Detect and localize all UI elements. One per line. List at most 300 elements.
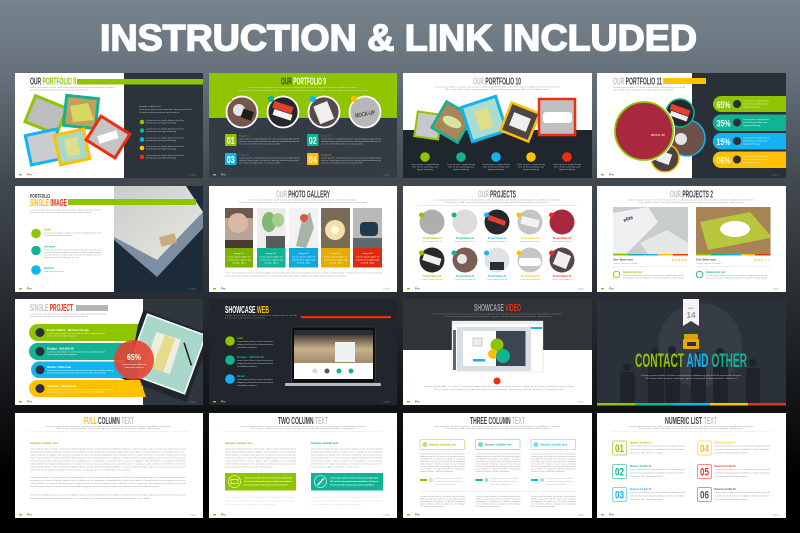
percentage pills: typesetting	[743, 161, 761, 164]
heading: CONTACT AND OTHER	[635, 351, 747, 372]
right column: Lorem ipsum dolor sit amet consectetur adipiscing elit sed do eiusmod	[311, 456, 383, 460]
intro text	[628, 198, 755, 204]
slide footers: logos	[19, 172, 614, 516]
features: incididunt labore	[237, 384, 258, 387]
column text: exercitation ullamco laboris nisi aliquip	[476, 462, 522, 466]
left column: Lorem ipsum dolor sit amet consectetur adipiscing elit sed do eiusmod	[225, 456, 297, 460]
intro text: Lorem ipsum dolor sit amet consectetur adipiscing elit sed do	[30, 312, 107, 316]
gallery captions: Lorem ipsum dolor sit	[324, 256, 347, 258]
right column: nostrud exercitation ullamco laboris nisi ut aliquip ex ea commodo	[311, 500, 381, 502]
percentage pills: Lorem ipsum is simply dummy	[743, 118, 770, 121]
ribbon badge: PART	[688, 307, 694, 310]
slide footers: logos: Pro	[27, 172, 32, 176]
numbered items: industry Lorem ipsum has been the industry standard dummy text	[239, 140, 299, 143]
accent markers: Lorem ipsum sit amet dolor	[546, 477, 573, 480]
slide footers: navigation: ⇦⊙⇨	[383, 400, 391, 404]
features: adipiscing elit sed do eiusmod tempor	[237, 343, 273, 346]
right column: nostrud exercitation ullamco laboris nisi ut aliquip ex ea commodo	[311, 460, 383, 462]
gallery photos	[225, 208, 382, 248]
list text: Numeric list title 02	[630, 465, 652, 468]
column text: Lorem ipsum dolor sit amet consectetur	[531, 452, 576, 456]
numbered items: industry Lorem ipsum has been the industry standard dummy text	[239, 159, 299, 162]
body text	[424, 385, 575, 391]
body text: Lorem ipsum dolor sit amet consectetur adipiscing elit sed do eiusmod tempor incididunt ut labore et dolore magna aliqua ut enim ad minim veniam quis	[30, 456, 185, 460]
colour strip	[597, 403, 786, 406]
subtitle boxes: Sample subtitle text	[484, 444, 512, 447]
bullet list: printing and typesetting	[146, 148, 177, 150]
slide: Contact and Other	[597, 299, 786, 406]
intro text: Ut enim ad minim veniam quis nostrud	[30, 315, 89, 318]
column text: Ut enim ad minim veniam quis nostrud	[476, 460, 522, 463]
list text: Ut enim ad minim veniam	[714, 452, 748, 454]
project pills: eiusmod tempor	[47, 353, 78, 356]
silhouettes photo	[620, 346, 760, 403]
gallery captions: consectetur adipiscing	[356, 258, 380, 262]
features: Lorem ipsum dolor sit amet consectetur	[237, 340, 273, 343]
lower text: Lorem ipsum dolor sit amet consectetur	[531, 495, 576, 498]
icon captions: typesetting	[453, 168, 470, 171]
left column: Lorem ipsum dolor sit amet consectetur adipiscing elit sed do eiusmod	[225, 496, 295, 499]
column text: adipiscing elit sed do eiusmod tempor	[476, 455, 521, 458]
left column: cillum dolore eu fugiat nulla pariatur	[225, 503, 275, 506]
sample items	[613, 271, 768, 280]
slide footers: navigation: ⇦⊙⇨	[189, 400, 197, 404]
accent markers: sed do eiusmod	[546, 484, 567, 486]
project labels: Project Name 07	[456, 275, 475, 278]
icon captions: typesetting	[417, 168, 434, 171]
intro text	[45, 425, 172, 430]
project labels	[422, 237, 572, 281]
slide: Three Column Text	[403, 413, 592, 518]
left column: elit sed do eiusmod tempor incididunt ut labore	[244, 480, 293, 483]
slide footers: navigation: ⇦⊙⇨	[383, 173, 391, 177]
list text: sed do eiusmod tempor incididunt ut labore et dolore	[714, 448, 770, 451]
numbered items: 02	[309, 136, 317, 147]
numbered items: ever since the 1500s when an unknown printer	[239, 162, 281, 164]
gallery captions: Image 03	[298, 253, 309, 255]
column text: exercitation ullamco laboris nisi aliquip	[531, 462, 577, 466]
intro text: Ut enim ad minim veniam quis nostrud exercitation ullamco laboris nisi ut aliquip ex ea commodo	[238, 89, 369, 92]
left column: Lorem ipsum dolor sit amet consectetur	[225, 466, 273, 468]
accent bar	[68, 199, 196, 205]
features: incididunt labore	[237, 365, 258, 368]
features: Goal	[237, 337, 243, 340]
project labels: Project Name 08	[488, 275, 507, 278]
slide footers: logos: Pro	[415, 400, 420, 404]
intro text: Ut enim ad minim veniam quis nostrud exercitation ullamco	[445, 427, 551, 430]
software screenshot	[452, 321, 543, 372]
column text	[420, 452, 577, 473]
lower text: incididunt ut labore et dolore magna	[420, 500, 466, 503]
intro text	[238, 86, 369, 92]
numbered items: 01	[227, 136, 235, 147]
intro text: Ut enim ad minim veniam quis nostrud exercitation	[30, 88, 89, 92]
intro text: Ut enim ad minim veniam	[225, 316, 265, 320]
project pills: Budget - $65,890.00	[47, 348, 75, 350]
column text: exercitation ullamco laboris nisi aliquip	[420, 462, 466, 466]
gallery captions: consectetur adipiscing	[324, 258, 348, 262]
numbered items: industry Lorem ipsum has been the industry standard dummy text	[321, 140, 381, 143]
project pills: Payment - $59,863.00	[47, 385, 77, 388]
subtitle text: Ut enim ad minim veniam quis nostrud exercitation ullamco	[645, 377, 738, 380]
slide: Portfolio Single Image	[15, 186, 203, 292]
ribbon badge: 14	[687, 311, 696, 320]
accent markers: consectetur adipiscing elit	[490, 480, 518, 483]
intro text	[239, 198, 368, 204]
contact items: eiusmod tempor incididunt ut labore et dolore magna aliqua	[44, 251, 102, 254]
slide footers: navigation: ⇦⊙⇨	[383, 513, 391, 517]
column text: incididunt ut labore et dolore magna	[531, 458, 577, 460]
intro text	[432, 312, 563, 318]
intro text: Lorem ipsum dolor sit amet consectetur adipiscing elit sed do	[30, 208, 102, 212]
heading: OUR PHOTO GALLERY	[276, 190, 330, 200]
gallery captions: sed do	[296, 262, 312, 264]
bullet list: Lorem ipsum is simply dummy text of the	[146, 154, 185, 157]
icon captions	[411, 163, 582, 171]
gallery captions: Lorem ipsum dolor sit	[260, 256, 283, 258]
number boxes: 06	[700, 490, 709, 502]
heading: OUR PROJECTS	[478, 190, 516, 200]
list text: sed do eiusmod tempor incididunt ut labore et dolore	[630, 448, 686, 451]
contact items: Overview	[44, 246, 55, 248]
project labels: Lorem ipsum dolor sit	[487, 240, 507, 243]
list text: Ut enim ad minim veniam	[714, 475, 748, 478]
subtitle text	[641, 374, 741, 380]
laptop mockup	[285, 327, 381, 386]
slide footers: navigation: ⇦⊙⇨	[189, 513, 197, 517]
panel text: Sample subtitle text	[139, 105, 162, 108]
main title: INSTRUCTION & LINK INCLUDED	[100, 16, 697, 58]
numbered items: Image 02	[321, 136, 332, 138]
contact items: laboris nisi ut aliquip ex ea	[44, 256, 80, 259]
contact items: Client	[44, 228, 51, 232]
left column: Lorem ipsum dolor sit amet consectetur adipiscing	[244, 476, 293, 480]
column text: Lorem ipsum dolor sit amet consectetur	[476, 452, 521, 456]
body text: Lorem ipsum dolor sit amet consectetur adipiscing elit sed do eiusmod tempor incididunt ut labore et dolore magna aliqua ut enim ad minim veniam quis	[30, 448, 186, 450]
list text: Lorem ipsum dolor sit amet consectetur adipiscing elit	[714, 468, 770, 471]
subtitle: Sample subtitle text	[30, 441, 58, 445]
column text: Ut enim ad minim veniam quis nostrud	[531, 460, 577, 463]
project labels: Lorem ipsum dolor sit	[552, 278, 572, 281]
slide: Two Column Text	[209, 413, 397, 518]
slide: Single Project	[15, 299, 211, 405]
heading: OUR PORTFOLIO 11	[613, 76, 662, 88]
contact icon	[683, 334, 699, 349]
numbered items: industry Lorem ipsum has been the industry standard dummy text	[321, 159, 381, 162]
slide: Our Projects 2	[597, 186, 786, 292]
column text: Ut enim ad minim veniam quis nostrud	[420, 460, 466, 463]
gallery captions: sed do	[264, 262, 280, 264]
icon captions: text of the printing and	[554, 166, 581, 168]
sample items: Sample title text	[706, 271, 725, 274]
accent markers: sed do eiusmod	[490, 484, 512, 486]
heading: TWO COLUMN TEXT	[278, 416, 328, 427]
intro text: Lorem ipsum dolor sit amet consectetur adipiscing elit sed do eiusmod tempor incididunt ut labore	[432, 312, 563, 316]
heading: NUMERIC LIST TEXT	[665, 416, 717, 427]
body text: nostrud exercitation ullamco laboris nisi ut aliquip ex ea commodo consequat duis aute irure dolor in reprehenderit in voluptate velit esse	[30, 460, 187, 462]
percentage pills: typesetting	[743, 106, 761, 108]
icon captions: Lorem ipsum is simply dummy	[447, 163, 476, 166]
intro text	[434, 198, 561, 204]
slide: Showcase Web	[209, 299, 397, 405]
subtitle boxes: Sample subtitle text	[429, 444, 456, 447]
bullet list: printing and typesetting	[146, 139, 177, 142]
column text: velit esse cillum dolore	[420, 470, 455, 473]
percentage pills: 15%	[716, 137, 731, 148]
intro text: Ut enim ad minim veniam quis nostrud exercitation ullamco laboris nisi	[445, 88, 550, 91]
heading: PORTFOLIO	[30, 194, 50, 200]
list text: Ut enim ad minim veniam	[714, 498, 748, 501]
project pills: Lorem ipsum is simply dummy text of the printing and typesetting	[47, 369, 114, 372]
lower text: incididunt ut labore et dolore magna	[476, 500, 522, 503]
gallery captions: Lorem ipsum dolor sit	[292, 256, 315, 258]
intro text: Lorem ipsum dolor sit amet consectetur adipiscing elit sed do eiusmod tempor incididunt ut labore	[628, 425, 755, 428]
percent circle	[114, 340, 154, 380]
ribbon badge	[683, 299, 699, 326]
slide footers: logos: Pro	[221, 512, 226, 516]
icon captions: Lorem ipsum is simply dummy	[553, 163, 582, 166]
slide footers: navigation: ⇦⊙⇨	[577, 287, 585, 291]
body text: Lorem ipsum dolor sit amet consectetur adipiscing elit sed do eiusmod tempor incididunt ut labore et dolore magna aliqua ut enim ad minim veniam quis	[30, 466, 186, 468]
accent markers: Lorem ipsum sit amet dolor	[435, 477, 462, 480]
project circles	[419, 210, 574, 272]
project labels: Lorem ipsum dolor sit	[455, 278, 475, 281]
list text: Numeric list title 05	[714, 465, 736, 468]
percentage pills	[713, 96, 786, 168]
body text: Lorem ipsum dolor sit amet consectetur adipiscing elit sed do eiusmod tempor incididunt ut labore et dolore magna aliqua ut enim ad minim veniam quis nostrud	[225, 272, 383, 274]
column text: ex ea commodo consequat duis aute	[420, 465, 466, 468]
lower text: adipiscing elit sed do eiusmod tempor	[420, 498, 465, 500]
contact items: www.yourwebsite.com	[44, 270, 64, 273]
project pills: eiusmod tempor	[47, 334, 78, 338]
project labels: Project Name 05	[553, 237, 572, 240]
right column: Lorem ipsum dolor sit amet consectetur	[311, 466, 359, 468]
gallery captions: Image 01	[234, 253, 245, 255]
right column: Lorem ipsum dolor sit amet consectetur adipiscing elit sed do eiusmod	[311, 496, 381, 499]
numbered items: Image 03	[239, 154, 250, 156]
percentage pills: Lorem ipsum is simply dummy	[743, 136, 770, 140]
numbered items: ever since the 1500s when an unknown printer	[321, 162, 363, 164]
lower text: Ut enim ad minim	[476, 505, 500, 508]
intro text: Ut enim ad minim veniam quis nostrud exercitation ullamco	[445, 201, 551, 204]
body text: Lorem ipsum dolor sit amet consectetur adipiscing elit sed do eiusmod tempor incididunt ut labore et dolore magna	[30, 485, 161, 488]
photo frames	[414, 96, 575, 142]
numbered items: Lorem ipsum is simply dummy text of the printing and typesetting	[239, 138, 300, 140]
list text: Numeric list title 04	[714, 442, 736, 444]
intro text: Lorem ipsum dolor sit amet consectetur adipiscing elit sed do	[225, 314, 298, 317]
slide footers: logos: Pro	[221, 400, 226, 404]
number boxes	[612, 441, 712, 502]
list text	[630, 442, 770, 501]
lower text: Lorem ipsum dolor sit amet consectetur	[476, 495, 521, 498]
bullet list: printing and typesetting	[146, 122, 177, 124]
lower text: exercitation ullamco laboris nisi aliquip	[420, 502, 466, 506]
accent bar	[76, 305, 108, 311]
intro text	[613, 86, 686, 92]
percentage pills: Lorem ipsum is simply dummy	[743, 100, 770, 102]
contact items: Website	[44, 267, 54, 270]
intro text: Lorem ipsum dolor sit amet consectetur adipiscing elit sed do eiusmod tempor incididunt ut labore	[240, 425, 367, 428]
slide footers: logos: Pro	[415, 286, 420, 290]
intro text: Ut enim ad minim veniam quis nostrud exercitation ullamco	[56, 427, 162, 430]
icon captions: text of the printing and	[448, 166, 475, 168]
list text: sed do eiusmod tempor incididunt ut labore et dolore	[714, 472, 770, 474]
right column: cillum dolore eu fugiat nulla pariatur	[311, 503, 361, 506]
slide: Our Projects	[403, 186, 592, 292]
intro text: Ut enim ad minim veniam quis nostrud exercitation ullamco	[251, 427, 357, 430]
slide: Numeric List Text	[597, 413, 786, 518]
slide: Our Portfolio 9	[209, 73, 397, 178]
sample items: eiusmod tempor incididunt ut labore et dolore magna aliqua	[623, 276, 685, 280]
project labels: Project Name 02	[456, 237, 475, 240]
icon captions: typesetting	[488, 168, 505, 171]
slide: Full Column Text	[15, 413, 203, 518]
heading: OUR PORTFOLIO 8	[30, 76, 76, 88]
project labels: Lorem ipsum dolor sit	[520, 278, 540, 281]
panel text: Lorem ipsum dolor sit amet consectetur adipiscing elit sed do	[139, 108, 193, 111]
numbered items: ever since the 1500s when an unknown printer	[321, 142, 363, 146]
percent circle: Lorem ipsum dolor sit	[122, 363, 146, 366]
slide footers: navigation: ⇦⊙⇨	[772, 513, 780, 517]
intro text: Lorem ipsum dolor sit amet consectetur adipiscing elit sed do eiusmod tempor incididunt ut labore	[628, 198, 755, 202]
project labels: Project Name 03	[488, 237, 507, 240]
slide footers: logos: Pro	[415, 512, 420, 516]
project pills: industry Lorem ipsum has been the standard	[47, 390, 106, 394]
column text: incididunt ut labore et dolore magna	[420, 458, 466, 460]
bullet list: Lorem ipsum is simply dummy text of the	[146, 128, 185, 130]
gallery captions: sed do	[232, 262, 248, 264]
intro text	[628, 425, 755, 430]
step dots	[226, 96, 357, 102]
lower text: exercitation ullamco laboris nisi aliquip	[531, 502, 577, 506]
contact items	[31, 228, 102, 275]
numbered items: Lorem ipsum is simply dummy text of the printing and typesetting	[321, 156, 382, 160]
body text: cillum dolore eu fugiat nulla pariatur excepteur sint occaecat cupidatat non proident sunt in culpa qui officia deserunt mollit anim id est	[30, 482, 187, 485]
column text: Lorem ipsum dolor sit amet consectetur	[420, 452, 465, 456]
project labels: Lorem ipsum dolor sit	[487, 278, 507, 281]
intro text: Lorem ipsum dolor sit amet consectetur adipiscing elit sed do eiusmod tempor incididunt ut labore	[45, 425, 172, 428]
heading: OUR PROJECTS 2	[670, 190, 713, 200]
percentage pills: 35%	[716, 118, 731, 130]
intro text: Ut enim ad minim veniam quis nostrud exercitation	[30, 211, 93, 214]
intro text: Ut enim ad minim veniam quis nostrud exercitation ullamco	[639, 201, 745, 204]
numbered items: Lorem ipsum is simply dummy text of the printing and typesetting	[321, 138, 382, 140]
bullet list: printing and typesetting	[146, 130, 177, 133]
body text: cillum dolore eu fugiat nulla pariatur excepteur sint occaecat cupidatat non proident sunt in culpa qui officia deserunt mollit anim id est	[30, 462, 186, 466]
percentage pills: 06%	[716, 156, 731, 166]
bullet list: Lorem ipsum is simply dummy text of the	[146, 119, 185, 122]
project pills	[29, 324, 146, 397]
lower text: exercitation ullamco laboris nisi aliquip	[476, 502, 522, 506]
intro text: Ut enim ad minim veniam quis nostrud	[613, 88, 674, 92]
percentage pills: typesetting	[743, 142, 761, 146]
intro text	[434, 425, 561, 430]
body text: nostrud exercitation ullamco laboris nisi ut aliquip ex ea commodo consequat duis aute irure dolor in reprehenderit in voluptate velit esse	[30, 450, 186, 454]
column text: velit esse cillum dolore	[531, 470, 566, 473]
project labels: Project Name 01	[423, 237, 442, 240]
body text: Lorem ipsum dolor sit amet consectetur adipiscing elit sed do eiusmod tempor incididunt ut labore et dolore magna aliqua	[424, 385, 575, 388]
list text: Lorem ipsum dolor sit amet consectetur adipiscing elit	[630, 491, 685, 494]
slide: Our Portfolio 8	[15, 73, 203, 178]
intro text	[30, 86, 115, 92]
captions and ratings: Client - Website custom	[613, 258, 634, 262]
features: Lorem ipsum dolor sit amet consectetur	[237, 359, 273, 362]
icon captions: text of the printing and	[483, 166, 510, 168]
numbered items	[225, 134, 382, 166]
circle cluster	[614, 99, 705, 172]
right column: Sample subtitle text	[311, 441, 338, 445]
icon row	[420, 152, 572, 162]
lower text: incididunt ut labore et dolore magna	[531, 500, 577, 503]
project pills: industry Lorem ipsum has been the standard	[47, 372, 106, 374]
numbered items: Image 04	[321, 154, 332, 156]
contact items: Lorem ipsum dolor sit amet consectetur adipiscing elit sed	[44, 248, 102, 252]
gallery captions: Image 02	[266, 253, 277, 255]
right column: Lorem ipsum dolor sit amet consectetur adipiscing	[330, 476, 379, 480]
project pills: Lorem ipsum dolor sit amet consectetur adipiscing elit	[47, 350, 105, 354]
gallery captions	[225, 248, 382, 268]
slide footers: logos: Pro	[609, 172, 614, 176]
sample items: eiusmod tempor incididunt ut labore et dolore magna aliqua	[706, 276, 768, 280]
intro text: Lorem ipsum dolor sit amet consectetur adipiscing elit sed do	[613, 86, 686, 89]
icon captions: text of the printing and	[412, 166, 439, 168]
bullet list: Lorem ipsum is simply dummy text of the	[146, 136, 185, 140]
left column: nostrud exercitation ullamco laboris nisi ut aliquip ex ea commodo	[225, 460, 297, 462]
circle cluster: MOCK UP	[651, 133, 665, 137]
left column: nostrud exercitation ullamco laboris nisi ut aliquip ex ea commodo	[225, 500, 295, 502]
column text: ex ea commodo consequat duis aute	[476, 465, 522, 468]
body text: nostrud exercitation ullamco laboris nisi ut aliquip ex ea commodo consequat duis aute irure dolor in reprehenderit in voluptate velit esse	[30, 479, 186, 482]
numbered items: Image 01	[239, 136, 250, 138]
intro text: Lorem ipsum dolor sit amet consectetur adipiscing elit sed do eiusmod tempor incididunt	[30, 86, 115, 89]
project labels: Lorem ipsum dolor sit	[520, 240, 540, 243]
card photo	[114, 186, 203, 277]
project labels: Lorem ipsum dolor sit	[552, 240, 572, 243]
intro text	[30, 312, 107, 318]
left column: cillum dolore eu fugiat nulla pariatur excepteur sint occaecat non	[225, 462, 297, 466]
column text: adipiscing elit sed do eiusmod tempor	[531, 455, 576, 458]
intro text	[30, 208, 102, 214]
photo circles	[226, 96, 380, 128]
right column: Ut enim ad minim veniam quis nostrud exercitation	[330, 484, 375, 486]
heading: FULL COLUMN TEXT	[84, 416, 134, 427]
column text: ex ea commodo consequat duis aute	[531, 465, 577, 468]
captions and ratings: Client - Website custom	[696, 258, 717, 262]
globe backdrop	[658, 303, 742, 387]
slide footers: navigation: ⇦⊙⇨	[577, 400, 585, 404]
project pills: Result - Fullscreal	[47, 366, 71, 369]
slide footers: logos: Pro	[27, 512, 32, 516]
slide footers: navigation: ⇦⊙⇨	[772, 287, 780, 291]
features: incididunt labore	[237, 346, 258, 349]
intro text	[434, 86, 561, 91]
gallery captions: sed do	[328, 262, 344, 264]
slide footers: logos: Pro	[609, 512, 614, 516]
heading: SHOWCASE WEB	[225, 305, 269, 316]
right column	[311, 441, 383, 506]
list text: Numeric list title 03	[630, 488, 652, 491]
heading: THREE COLUMN TEXT	[470, 416, 525, 427]
right column: cillum dolore eu fugiat nulla pariatur excepteur sint occaecat non	[311, 462, 383, 466]
left column	[225, 441, 297, 506]
subtitle text: Lorem ipsum dolor sit amet consectetur adipiscing elit sed do eiusmod tempor	[641, 374, 741, 377]
icon captions: typesetting	[559, 168, 576, 171]
business card photo	[613, 207, 688, 256]
subtitle boxes	[420, 440, 576, 450]
bullet list: Lorem ipsum is simply dummy text of the	[146, 145, 185, 148]
body text: Duis aute irure dolor in reprehenderit in voluptate velit esse cillum dolore eu fugiat nulla	[434, 388, 565, 391]
gallery captions: consectetur adipiscing	[260, 258, 283, 262]
